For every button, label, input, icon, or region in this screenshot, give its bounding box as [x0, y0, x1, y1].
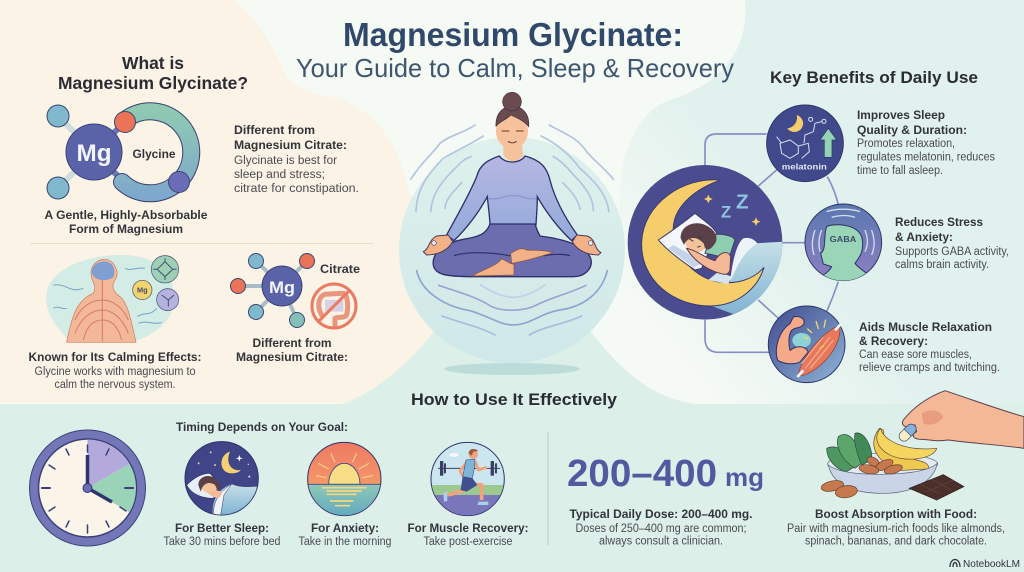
- text: stress benefit: & Anxiety:: [895, 230, 953, 244]
- title: [296, 16, 734, 83]
- text: stress benefit: Reduces Stress: [895, 215, 983, 229]
- text: daily dose: Doses of 250–400 mg are common;: [576, 523, 746, 535]
- panel: how to use: [30, 390, 1024, 548]
- text: sleep benefit: Promotes relaxation,: [857, 138, 955, 150]
- text: daily dose: Typical Daily Dose: 200–400 mg.: [570, 507, 752, 521]
- spinach: [827, 447, 855, 472]
- text: different from citrate: sleep and stress;: [234, 169, 325, 181]
- heading: how to use: How to Use It Effectively: [411, 390, 618, 409]
- text: different from citrate: Different from: [234, 123, 315, 137]
- text: calming effects: calm the nervous system.: [54, 379, 176, 391]
- text: for anxiety: Take in the morning: [298, 536, 392, 548]
- sleeping moon circle: Z: [721, 202, 731, 221]
- muscle circle: [768, 306, 845, 383]
- text: for muscle recovery: For Muscle Recovery:: [408, 521, 528, 535]
- text: timing heading: Timing Depends on Your Goal:: [176, 420, 348, 434]
- legs: [433, 224, 591, 277]
- text: different from citrate: Glycinate is best for: [234, 155, 337, 167]
- text: for better sleep: [164, 521, 280, 548]
- text: calming effects: [28, 350, 202, 391]
- sleeping moon circle: Z: [736, 190, 749, 213]
- meditating figure: [399, 92, 625, 375]
- icon: Mg citrate molecule: [230, 254, 360, 328]
- icons: timing circles: [185, 442, 505, 518]
- text: sleep benefit: Improves Sleep: [857, 108, 945, 122]
- text: for better sleep: Take 30 mins before bed: [164, 536, 280, 548]
- text: stress benefit: [895, 215, 1009, 271]
- text: muscle benefit: [859, 320, 1000, 374]
- text: daily dose: [570, 507, 752, 548]
- text: boost absorption: spinach, bananas, and dark chocolate.: [805, 536, 987, 548]
- text: calming effects: Known for Its Calming Effects:: [28, 350, 202, 364]
- benefits illustration: [628, 105, 882, 383]
- heading: what is: [58, 53, 248, 93]
- text: for muscle recovery: Take post-exercise: [424, 536, 512, 548]
- text: for better sleep: For Better Sleep:: [175, 521, 269, 535]
- bowl front: [828, 463, 937, 493]
- text: calming effects: Glycine works with magnesium to: [34, 366, 196, 378]
- caption: gentle form: Form of Magnesium: [69, 222, 183, 236]
- benefits illustration: melatonin: [782, 162, 827, 172]
- watermark: NotebookLM: NotebookLM: [963, 558, 1020, 570]
- text: different from citrate: Magnesium Citrate:: [234, 138, 347, 152]
- text: boost absorption: Boost Absorption with Food:: [815, 507, 977, 521]
- capsule: [897, 422, 918, 443]
- text: for anxiety: [298, 521, 392, 548]
- bowl back: [828, 453, 938, 475]
- icon: sunrise: [307, 442, 382, 518]
- text: stress benefit: Supports GABA activity,: [895, 246, 1009, 258]
- head: [503, 145, 523, 161]
- chocolate: [909, 475, 964, 500]
- heading: what is: Magnesium Glycinate?: [58, 73, 248, 93]
- caption: different from citrate: [236, 336, 348, 364]
- almonds in bowl: [858, 455, 903, 476]
- illustration: food bowl and hand: [820, 391, 1024, 500]
- heading: what is: What is: [122, 53, 184, 73]
- heading: key benefits: Key Benefits of Daily Use: [770, 68, 978, 87]
- caption: different from citrate: Different from: [252, 336, 332, 350]
- text: muscle benefit: & Recovery:: [859, 334, 928, 348]
- text: daily dose: always consult a clinician.: [599, 536, 723, 548]
- torso and arms: [447, 156, 577, 241]
- bananas: [874, 428, 929, 471]
- title: Magnesium Glycinate:: [343, 16, 683, 53]
- text: different from citrate: citrate for constipation.: [234, 183, 359, 195]
- hands: [423, 235, 453, 255]
- caption: gentle form: [44, 208, 208, 236]
- connectors: [705, 134, 838, 352]
- benefits illustration: GABA: [830, 234, 856, 244]
- icon: Mg citrate molecule: Mg: [269, 278, 295, 297]
- icon: Mg glycine molecule: Mg: [76, 140, 112, 167]
- icon: better sleep: [185, 442, 260, 516]
- text: sleep benefit: regulates melatonin, reduces: [857, 152, 995, 164]
- text: muscle benefit: Can ease sore muscles,: [859, 349, 972, 361]
- icon: Mg citrate molecule: Citrate: [320, 262, 360, 276]
- title: Your Guide to Calm, Sleep & Recovery: [296, 53, 734, 83]
- text: stress benefit: calms brain activity.: [895, 259, 989, 271]
- icon: crossed-out intestine: [312, 284, 356, 328]
- loose almonds: [820, 479, 858, 499]
- text: muscle benefit: relieve cramps and twitching.: [859, 362, 1000, 374]
- text: sleep benefit: Quality & Duration:: [857, 123, 967, 137]
- text: for muscle recovery: [408, 521, 528, 548]
- dose number: mg: [725, 464, 764, 492]
- icon: nervous system: [46, 255, 179, 342]
- sleeping moon circle: [628, 165, 783, 320]
- text: sleep benefit: [857, 108, 995, 177]
- melatonin circle: [767, 105, 843, 182]
- text: boost absorption: [787, 507, 1005, 548]
- caption: different from citrate: Magnesium Citrate:: [236, 350, 348, 364]
- text: boost absorption: Pair with magnesium-rich foods like almonds,: [787, 523, 1005, 535]
- text: muscle benefit: Aids Muscle Relaxation: [859, 320, 992, 334]
- text: different from citrate: [234, 123, 359, 195]
- feet: [473, 259, 514, 276]
- text: for anxiety: For Anxiety:: [311, 521, 379, 535]
- hand: [902, 391, 1024, 448]
- icon: runner with barbell: [430, 442, 505, 518]
- aura waves: [411, 125, 613, 335]
- panel: key benefits: [628, 68, 1009, 383]
- dose number: 200–400: [567, 453, 717, 495]
- GABA circle: [805, 204, 882, 281]
- panel: what is magnesium glycinate: [28, 53, 373, 391]
- icon: clock: [30, 430, 146, 546]
- icon: Mg glycine molecule: Glycine: [132, 147, 176, 161]
- icon: Mg glycine molecule: [47, 105, 191, 199]
- icon: nervous system: Mg: [137, 286, 148, 295]
- text: sleep benefit: time to fall asleep.: [857, 165, 943, 177]
- caption: gentle form: A Gentle, Highly-Absorbable: [44, 208, 208, 222]
